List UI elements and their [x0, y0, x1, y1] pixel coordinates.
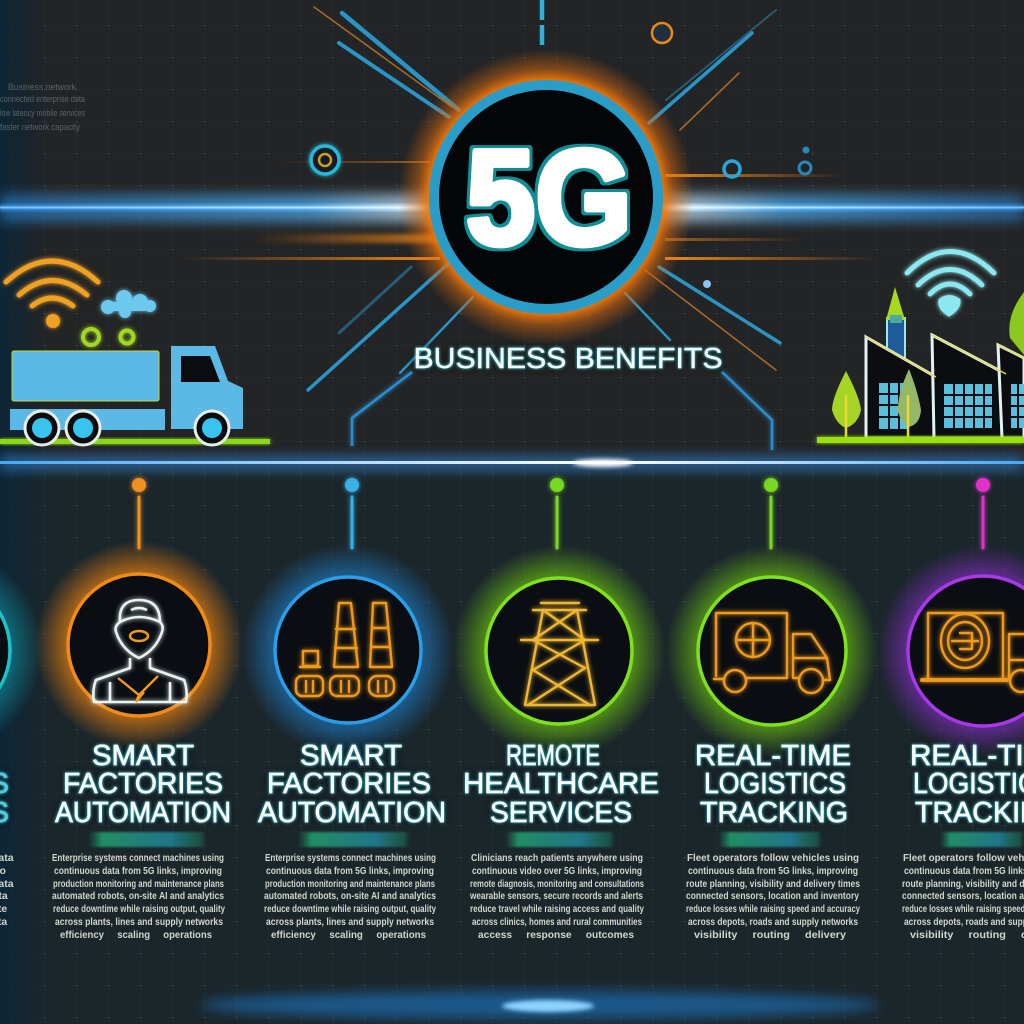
- text block: [902, 852, 1024, 941]
- faint text top left: connected enterprise data: [0, 94, 85, 104]
- heading: FACTORIES: [267, 768, 431, 800]
- heading: [55, 740, 231, 829]
- factory buildings: [866, 335, 1024, 438]
- icon: tower in green ring: [453, 545, 665, 757]
- text block: efficiency scaling operations: [271, 929, 426, 941]
- text block: [469, 852, 644, 941]
- faint text top left: [0, 82, 85, 132]
- connector lines from heading: [352, 372, 772, 450]
- heading: SMART: [92, 740, 194, 772]
- icon: green coins: [83, 329, 134, 345]
- accent smear: [940, 832, 1024, 847]
- text block: across clinics, homes and rural communities: [472, 916, 642, 928]
- small floating nodes: [311, 23, 811, 288]
- factory windows: [879, 383, 1024, 429]
- heading: TRACKING: [700, 797, 848, 829]
- leaf right: [1009, 292, 1024, 355]
- icon: truck in purple ring: [877, 545, 1024, 757]
- icon: truck in green ring: [666, 545, 878, 757]
- trees: [832, 369, 921, 438]
- text block: [686, 852, 860, 941]
- text block: reduce losses while raising speed and accuracy: [686, 903, 860, 915]
- text block: visibility routing delivery: [694, 929, 846, 941]
- text block: route planning, visibility and delivery times: [686, 878, 860, 890]
- heading: AUTOMATION: [258, 797, 446, 829]
- text block: continuous data from 5G links, improving: [266, 865, 434, 877]
- heading: [910, 740, 1024, 829]
- text block: efficiency scaling operations: [60, 929, 212, 941]
- faint text top left: low latency mobile services: [0, 108, 85, 118]
- text block: production monitoring and maintenance plans: [265, 878, 435, 890]
- panel: smart factories automation 2: [242, 544, 454, 941]
- text block: wearable sensors, secure records and alerts: [469, 890, 643, 902]
- text block: continuous data from 5G links, improving: [688, 865, 858, 877]
- illustration: delivery truck: [0, 261, 270, 445]
- text block: access response outcomes: [478, 929, 634, 941]
- heading: REMOTE: [506, 740, 600, 772]
- bottom light glow: [200, 991, 880, 1019]
- node connectors: [132, 478, 990, 548]
- panel: remote healthcare services: [453, 545, 665, 941]
- heading: FACTORIES: [63, 768, 223, 800]
- text block: continuous data from 5G links, improving: [54, 865, 222, 877]
- horizontal light beam: [0, 194, 1024, 222]
- text block: [264, 852, 436, 941]
- accent smear: [88, 832, 206, 847]
- text block: reduce downtime while raising output, quality: [264, 903, 436, 915]
- text block: continuous video over 5G links, improving: [472, 865, 642, 877]
- chimney: [886, 287, 905, 358]
- panel: real-time logistics tracking 1: [666, 545, 878, 941]
- heading: REAL-TIME: [695, 740, 851, 772]
- icon: chimneys in blue ring: [242, 544, 454, 756]
- heading: [463, 740, 659, 829]
- accent smear: [505, 832, 615, 847]
- heading: AUTOMATION: [55, 797, 231, 829]
- text block: Enterprise systems connect machines using: [52, 852, 224, 864]
- 5G badge: [398, 49, 694, 345]
- text block: production monitoring and maintenance plans: [53, 878, 224, 890]
- panel: smart factories automation 1: [35, 541, 243, 941]
- text block: automated robots, on-site AI and analytics: [264, 890, 436, 902]
- accent smear: [298, 832, 410, 847]
- faint text top left: faster network capacity: [0, 122, 80, 132]
- heading: LOGISTICS: [704, 768, 846, 800]
- faint text top left: Business network: [8, 82, 76, 92]
- panel: real-time logistics tracking 2: [877, 545, 1024, 941]
- orange light streaks: [180, 161, 880, 260]
- text block: across depots, roads and supply networks: [688, 916, 858, 928]
- truck wheels: [25, 411, 229, 445]
- icon: worker in orange ring: [35, 541, 243, 749]
- text block: reduce travel while raising access and quality: [470, 903, 644, 915]
- 5G label: 5G: [466, 122, 632, 273]
- heading: [695, 740, 851, 829]
- text block: across plants, lines and supply networks: [55, 916, 223, 928]
- text block: automated robots, on-site AI and analytics: [52, 890, 224, 902]
- heading: [258, 740, 446, 829]
- text block: Clinicians reach patients anywhere using: [471, 852, 643, 864]
- text block: Fleet operators follow vehicles using: [687, 852, 859, 864]
- illustration: smart factory: [817, 252, 1024, 443]
- icon: orange wifi signal: [6, 261, 98, 328]
- heading: HEALTHCARE: [463, 768, 659, 800]
- text block: reduce downtime while raising output, quality: [53, 903, 225, 915]
- panel: clipped left column: [0, 545, 43, 928]
- heading: SMART: [300, 740, 402, 772]
- light rays around 5G badge: [308, 0, 780, 390]
- divider line: [0, 456, 1024, 470]
- ground line: [0, 439, 270, 444]
- text block: Enterprise systems connect machines using: [265, 852, 436, 864]
- text block: connected sensors, location and inventory: [686, 890, 859, 902]
- heading: SERVICES: [490, 797, 632, 829]
- text block: remote diagnosis, monitoring and consultations: [470, 878, 644, 890]
- accent smear: [718, 832, 822, 847]
- icon: cyan wifi signal: [907, 252, 994, 315]
- icon: blue cloud: [101, 290, 156, 318]
- text block: across plants, lines and supply networks: [266, 916, 434, 928]
- ground line: [817, 437, 1024, 443]
- truck body: [10, 346, 243, 430]
- heading: BUSINESS BENEFITS: [414, 343, 722, 375]
- text block: [52, 852, 225, 941]
